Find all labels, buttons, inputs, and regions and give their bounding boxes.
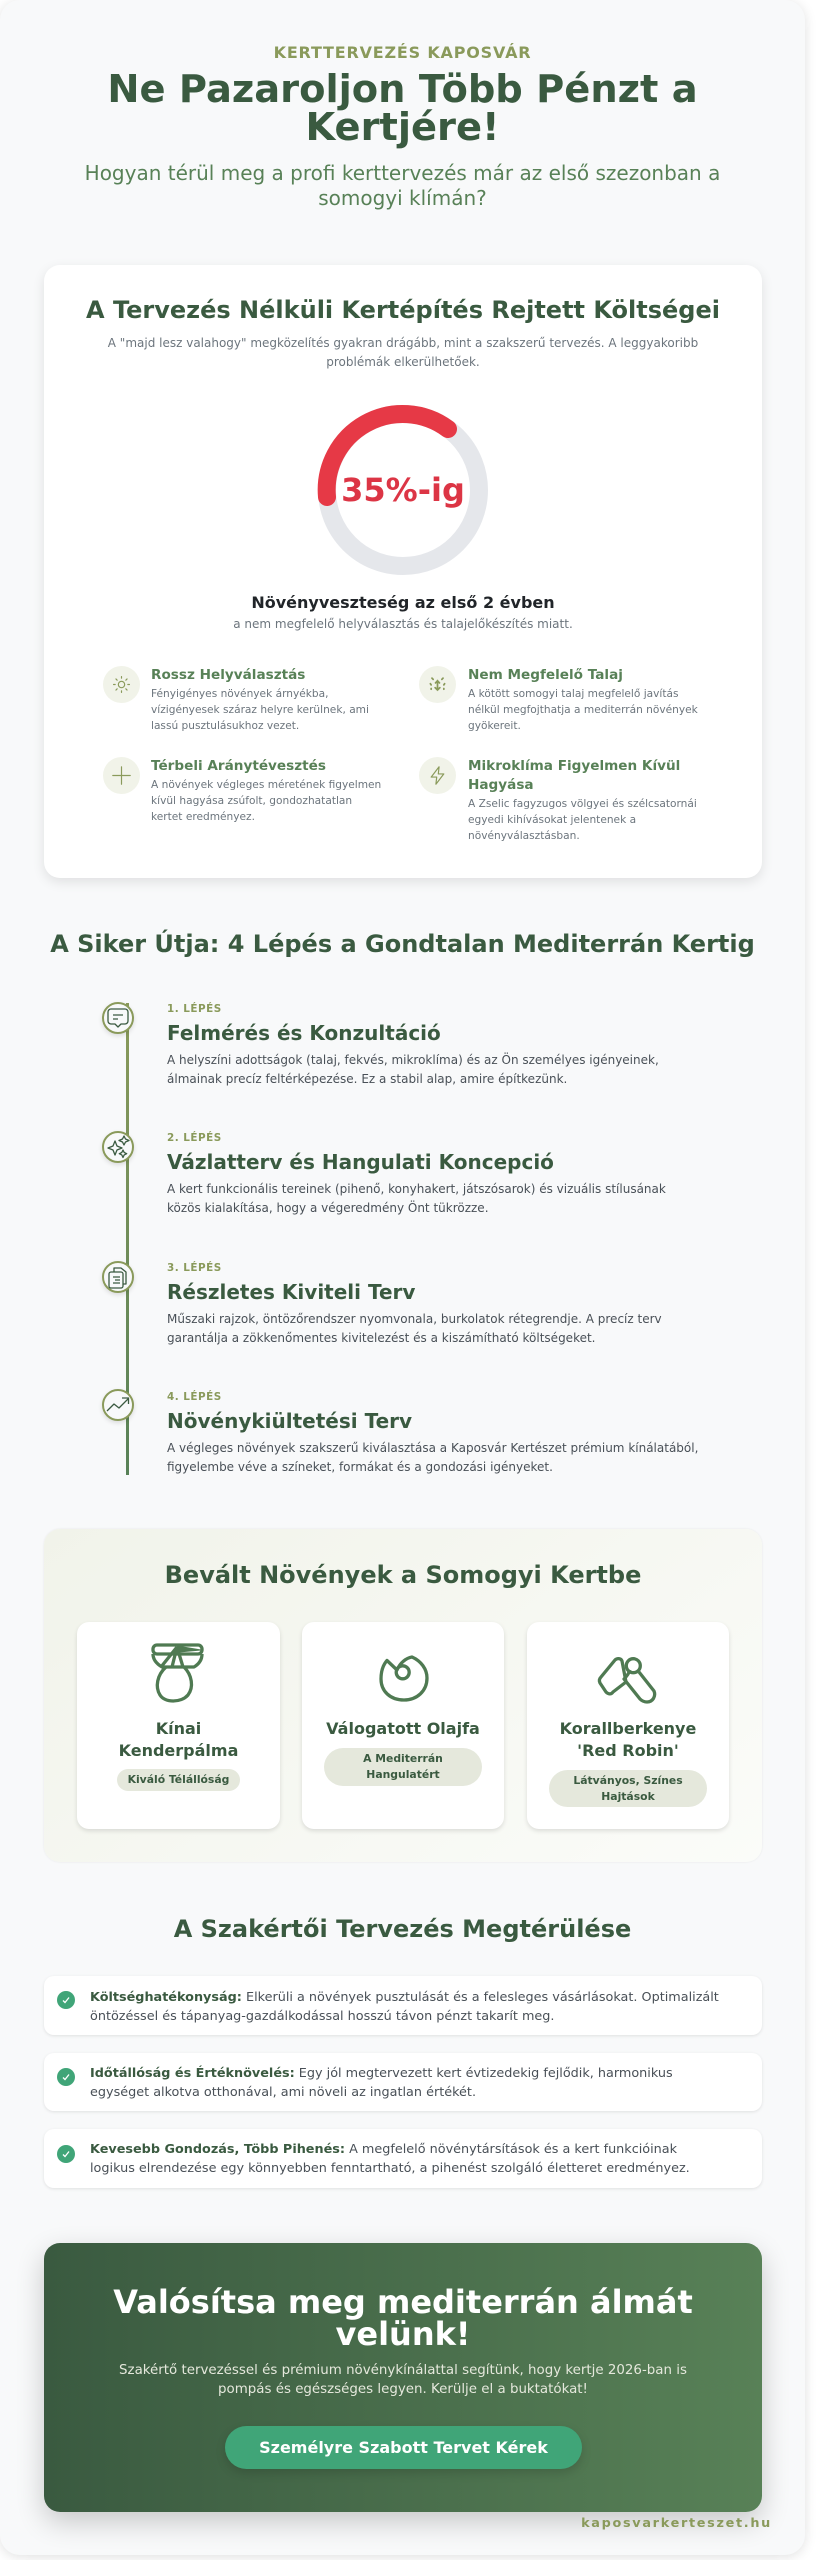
text: logikus elrendezése egy könnyebben fenntartható, a pihenést szolgáló életteret eredményez.	[90, 2161, 690, 2176]
icon: soil	[419, 666, 456, 703]
plant name	[119, 1719, 238, 1760]
text	[90, 2142, 690, 2176]
cta text: Szakértő tervezéssel és prémium növénykínálattal segítünk, hogy kertje 2026-ban is	[119, 2363, 687, 2378]
icon: sparkles	[102, 1131, 134, 1163]
problem: microclimate	[419, 757, 697, 842]
text: Időtállóság és Értéknövelés: Egy jól megtervezett kert évtizedekig fejlődik, harmonikus	[90, 2066, 673, 2081]
icon: sun	[103, 666, 140, 703]
heading: Részletes Kiviteli Terv	[167, 1280, 415, 1304]
tag: Hangulatért	[366, 1768, 440, 1781]
cta text: pompás és egészséges legyen. Kerülje el a buktatókat!	[218, 2382, 588, 2397]
panel intro: A "majd lesz valahogy" megközelítés gyakran drágább, mint a szakszerű tervezés. A leggyakoribb	[108, 336, 698, 350]
benefit 1	[44, 1976, 762, 2035]
tag: Látványos, Színes	[573, 1774, 683, 1787]
footer url: kaposvarkerteszet.hu	[581, 2516, 772, 2531]
text: gyökereit.	[468, 720, 521, 732]
problem: soil	[419, 666, 698, 732]
cta button: Személyre Szabott Tervet Kérek	[259, 2438, 548, 2457]
donut value: 35%-ig	[341, 471, 465, 509]
text: A kert funkcionális tereinek (pihenő, konyhakert, játszósarok) és vizuális stílusának	[167, 1182, 666, 1196]
tag	[324, 1748, 482, 1786]
call to action	[44, 2243, 762, 2512]
text: öntözéssel és tápanyag-gazdálkodással hosszú távon pénzt takarít meg.	[90, 2009, 554, 2024]
text: figyelembe véve a színeket, formákat és a gondozási igényeket.	[167, 1460, 553, 1474]
text: egyedi kihívásokat jelentenek a	[468, 814, 636, 826]
label: 3. LÉPÉS	[167, 1262, 222, 1274]
heading: Felmérés és Konzultáció	[167, 1021, 441, 1045]
text: Fényigényes növények árnyékba,	[151, 688, 328, 700]
icon: chat	[102, 1002, 134, 1034]
icon: trend up	[102, 1389, 134, 1421]
subtitle: somogyi klímán?	[318, 186, 487, 210]
section heading: payoff: A Szakértői Tervezés Megtérülése	[174, 1915, 631, 1943]
panel intro	[108, 336, 698, 369]
panel heading: A Tervezés Nélküli Kertépítés Rejtett Költségei	[86, 296, 720, 324]
step 3	[101, 1261, 662, 1345]
icon: palm	[151, 1643, 204, 1703]
cta heading: velünk!	[336, 2315, 470, 2353]
step 1	[101, 1002, 659, 1086]
text: Kevesebb Gondozás, Több Pihenés: A megfelelő növénytársítások és a kert funkcióinak	[90, 2142, 677, 2157]
text: lassú pusztulásukhoz vezet.	[151, 720, 299, 732]
cta heading	[113, 2283, 693, 2353]
icon: check	[57, 1991, 75, 2009]
tag: A Mediterrán	[363, 1752, 443, 1765]
text: garantálja a zökkenőmentes kivitelezést és a kiszámítható költségeket.	[167, 1331, 596, 1345]
text	[167, 1052, 659, 1086]
panel heading: Bevált Növények a Somogyi Kertbe	[165, 1561, 641, 1589]
heading: Vázlatterv és Hangulati Koncepció	[167, 1150, 554, 1174]
icon: bolt	[419, 757, 456, 794]
heading: Térbeli Aránytévesztés	[151, 758, 326, 774]
plant name: Válogatott Olajfa	[326, 1719, 480, 1738]
subtitle: Hogyan térül meg a profi kerttervezés már az első szezonban a	[85, 161, 720, 185]
text: A végleges növények szakszerű kiválasztása a Kaposvár Kertészet prémium kínálatából,	[167, 1441, 698, 1455]
benefit 2	[44, 2053, 762, 2111]
plant name	[560, 1719, 696, 1760]
icon: check	[57, 2145, 75, 2163]
stat title: Növényveszteség az első 2 évben	[251, 593, 555, 612]
cta button	[225, 2426, 582, 2469]
text: A helyszíni adottságok (talaj, fekvés, mikroklíma) és az Ön személyes igényeinek,	[167, 1053, 659, 1067]
cta heading: Valósítsa meg mediterrán álmát	[113, 2283, 693, 2321]
text: egységet alkotva otthonával, ami növeli az ingatlan értékét.	[90, 2085, 476, 2100]
label: 2. LÉPÉS	[167, 1132, 222, 1144]
panel: hidden costs	[44, 265, 762, 878]
tag	[117, 1769, 240, 1791]
tag: Hajtások	[601, 1790, 655, 1803]
step 4	[101, 1389, 698, 1474]
icon: check	[57, 2068, 75, 2086]
plant card: olive	[302, 1622, 504, 1829]
eyebrow: KERTTERVEZÉS KAPOSVÁR	[274, 43, 531, 62]
donut chart: 35%	[318, 405, 488, 575]
text: növényválasztásban.	[468, 830, 580, 842]
text	[468, 798, 697, 842]
text	[151, 779, 381, 823]
cta text	[119, 2363, 687, 2397]
text: nélkül megfojthatja a mediterrán növények	[468, 704, 698, 716]
text: kívül hagyása zsúfolt, gondozhatatlan	[151, 795, 352, 807]
text	[167, 1182, 666, 1215]
text: álmainak precíz feltérképezése. Ez a stabil alap, amire építkezünk.	[167, 1072, 567, 1086]
icon: documents	[102, 1261, 134, 1293]
text: A kötött somogyi talaj megfelelő javítás	[468, 688, 679, 700]
label: 1. LÉPÉS	[167, 1003, 222, 1015]
text: Költséghatékonyság: Elkerüli a növények pusztulását és a felesleges vásárlásokat. Optimalizált	[90, 1990, 719, 2005]
text: közös kialakítása, hogy a végeredmény Önt tükrözze.	[167, 1201, 489, 1215]
panel intro: problémák elkerülhetőek.	[326, 355, 480, 369]
problem: location	[103, 666, 369, 732]
title	[107, 67, 698, 150]
plant name: 'Red Robin'	[577, 1741, 679, 1760]
section heading: steps: A Siker Útja: 4 Lépés a Gondtalan Mediterrán Kertig	[50, 930, 755, 958]
text	[151, 688, 369, 732]
title: Ne Pazaroljon Több Pénzt a	[107, 67, 698, 112]
timeline line	[126, 1003, 129, 1475]
text: Műszaki rajzok, öntözőrendszer nyomvonala, burkolatok rétegrendje. A precíz terv	[167, 1312, 662, 1326]
problem: proportions	[103, 757, 381, 823]
heading: Mikroklíma Figyelmen Kívül	[468, 758, 680, 774]
text	[90, 1990, 719, 2024]
plant card: palm	[77, 1622, 280, 1829]
heading: Növénykiültetési Terv	[167, 1409, 412, 1433]
icon: plus	[103, 757, 140, 794]
plant name: Kínai	[156, 1719, 201, 1738]
text: A Zselic fagyzugos völgyei és szélcsatornái	[468, 798, 697, 810]
stat caption: a nem megfelelő helyválasztás és talajelőkészítés miatt.	[233, 617, 573, 631]
step 2	[101, 1131, 666, 1215]
tag: Kiváló Télállóság	[128, 1773, 229, 1786]
text	[167, 1312, 662, 1345]
subtitle	[85, 161, 720, 210]
text: kertet eredményez.	[151, 811, 255, 823]
icon: photinia	[598, 1657, 656, 1704]
label: 4. LÉPÉS	[167, 1391, 222, 1403]
plant name: Korallberkenye	[560, 1719, 696, 1738]
text	[90, 2066, 673, 2100]
icon: olive	[379, 1655, 429, 1702]
panel: recommended plants	[44, 1529, 762, 1862]
text	[167, 1441, 698, 1474]
heading	[468, 758, 680, 793]
text: vízigényesek száraz helyre kerülnek, ami	[151, 704, 369, 716]
text: A növények végleges méretének figyelmen	[151, 779, 381, 791]
tag	[549, 1770, 707, 1807]
heading: Rossz Helyválasztás	[151, 667, 305, 683]
plant name: Kenderpálma	[119, 1741, 238, 1760]
plant card: photinia	[527, 1622, 729, 1829]
text	[468, 688, 698, 732]
benefit 3	[44, 2129, 762, 2188]
title: Kertjére!	[305, 105, 500, 150]
heading: Hagyása	[468, 777, 534, 793]
heading: Nem Megfelelő Talaj	[468, 667, 623, 683]
